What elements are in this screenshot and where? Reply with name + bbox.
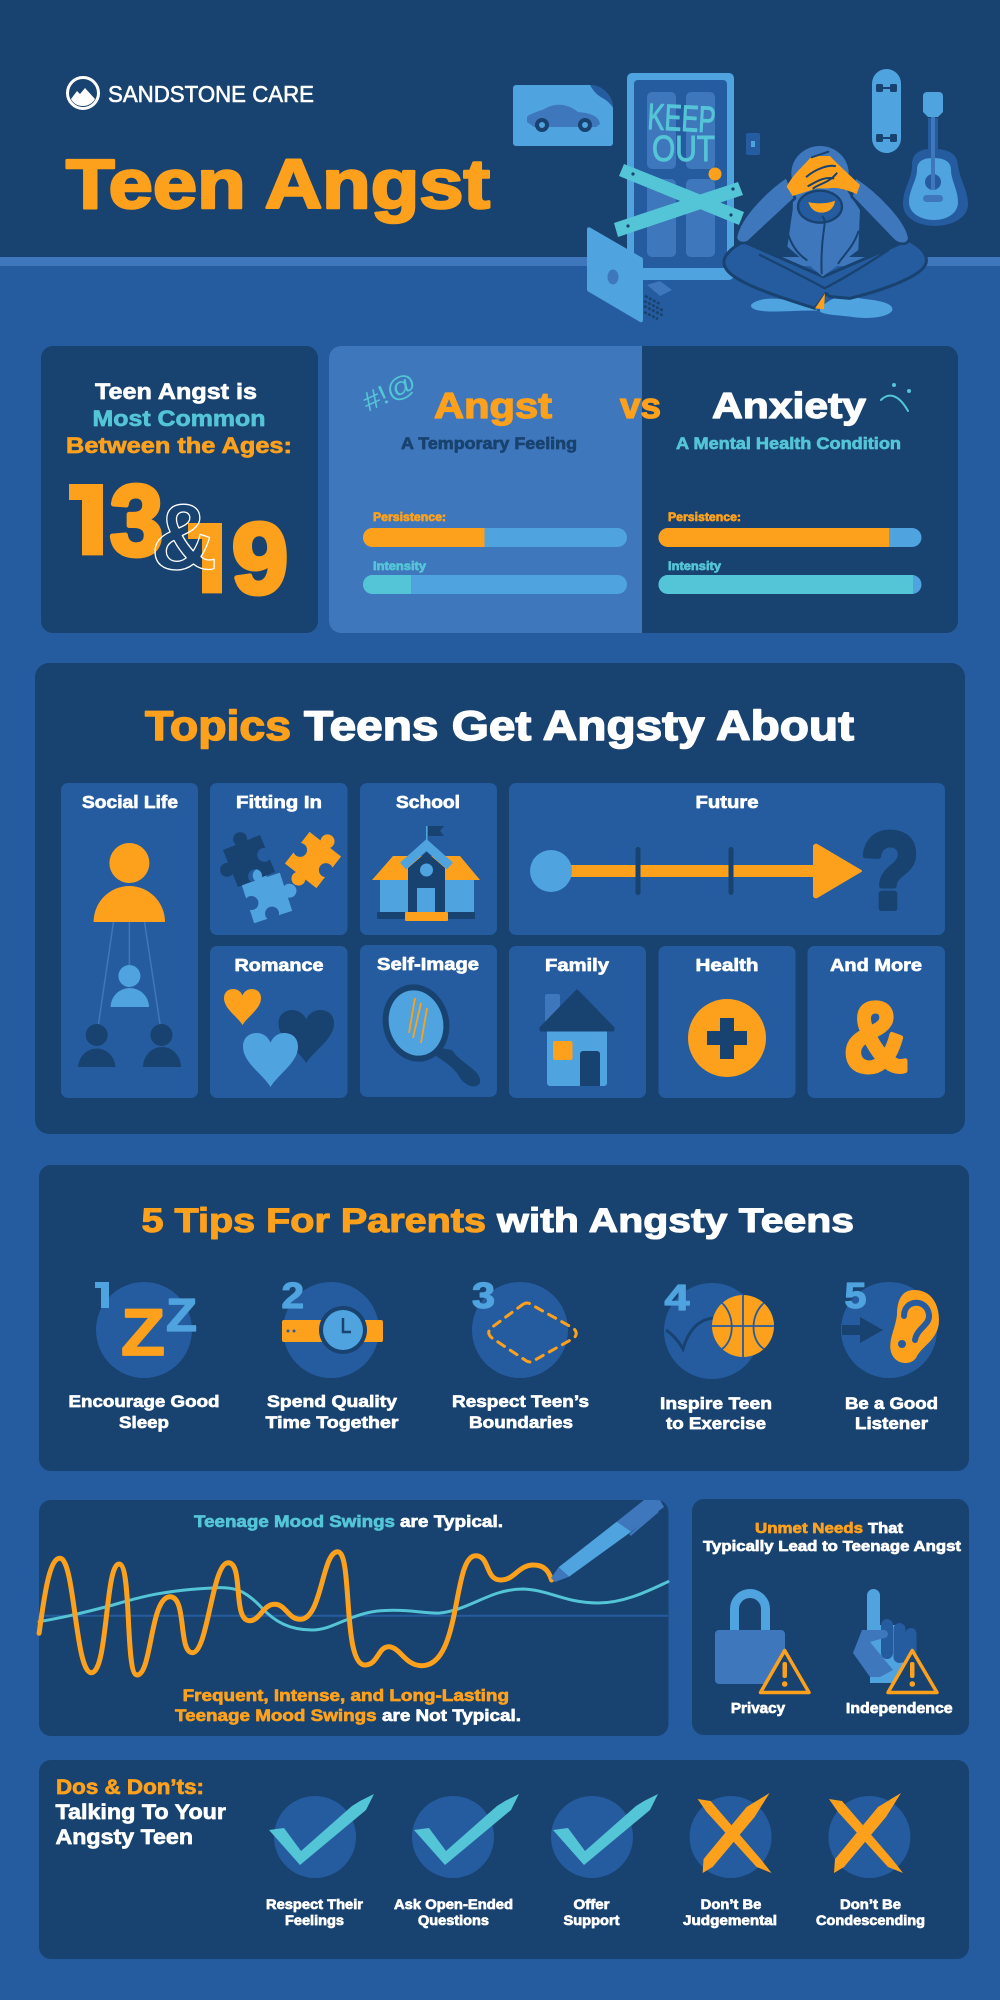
don't: be condescending bbox=[816, 1793, 925, 1928]
logo: Sandstone Care bbox=[68, 78, 314, 108]
don't: be condescending: Condescending bbox=[816, 1913, 925, 1928]
card: romance: Romance bbox=[234, 955, 324, 975]
bars: anxiety bbox=[658, 512, 922, 594]
do: respect their feelings: Feelings bbox=[285, 1913, 344, 1928]
tip 4: exercise: Inspire Teen bbox=[660, 1394, 772, 1413]
heading: topics: Topics bbox=[145, 702, 291, 749]
card: and more: & bbox=[844, 982, 908, 1092]
icon: padlock with warning bbox=[715, 1594, 809, 1717]
heading: typical swings bbox=[194, 1512, 503, 1531]
tip 5: listen: Listener bbox=[855, 1414, 928, 1433]
card: and more: And More bbox=[830, 955, 922, 975]
big numbers 13 & 19 bbox=[69, 482, 287, 596]
tip 3: boundaries bbox=[452, 1275, 589, 1432]
heading: dos and don'ts: Talking To Your bbox=[56, 1801, 226, 1824]
tip 2: quality time: 2 bbox=[282, 1275, 304, 1316]
tip 1: sleep bbox=[68, 1275, 219, 1432]
chart: mood curves bbox=[39, 1552, 668, 1675]
don't: be condescending: Don’t Be bbox=[840, 1897, 902, 1912]
tip 1: sleep: Z bbox=[166, 1289, 197, 1341]
heading: most common ages bbox=[66, 379, 292, 458]
do: offer support: Support bbox=[564, 1913, 620, 1928]
heading: dos and don'ts: Dos & Don’ts: bbox=[56, 1776, 204, 1799]
icon: door with keep out bbox=[614, 73, 744, 280]
do: offer support: Offer bbox=[574, 1897, 610, 1912]
panel: age range bbox=[41, 346, 318, 633]
tip 4: exercise: 4 bbox=[664, 1277, 690, 1318]
tip 2: quality time: Time Together bbox=[266, 1413, 399, 1432]
tip 1: sleep: Z bbox=[121, 1295, 165, 1369]
card: fitting in: Fitting In bbox=[236, 792, 322, 812]
heading: topics: Teens Get Angsty About bbox=[304, 702, 854, 749]
tip 4: exercise bbox=[660, 1277, 774, 1433]
tip 3: boundaries: 3 bbox=[472, 1275, 495, 1316]
bars: angst: Persistence: bbox=[373, 512, 446, 524]
icon: sad face bbox=[881, 384, 910, 411]
label: vs: vs bbox=[620, 385, 661, 426]
bars: angst: Intensity bbox=[373, 561, 427, 573]
heading: most common ages: Most Common bbox=[92, 406, 266, 431]
icon: laptop bbox=[587, 227, 672, 322]
panel: angst vs anxiety bbox=[329, 346, 958, 633]
card: social life: Social Life bbox=[82, 792, 178, 812]
logo: Sandstone Care: SANDSTONE CARE bbox=[108, 81, 314, 107]
card: social life bbox=[61, 783, 198, 1098]
big numbers 13 & 19: & bbox=[151, 484, 217, 589]
heading: unmet needs: Typically Lead to Teenage Angst bbox=[703, 1538, 961, 1555]
card: self-image bbox=[360, 945, 497, 1097]
card: fitting in bbox=[209, 783, 348, 935]
tip 1: sleep: 1 bbox=[96, 1275, 112, 1316]
card: school: School bbox=[396, 792, 460, 812]
header band bbox=[0, 0, 1000, 266]
heading: tips: 5 Tips For Parents bbox=[142, 1202, 486, 1240]
caption: not typical swings: Frequent, Intense, and Long-Lasting bbox=[183, 1686, 509, 1705]
don't: be judgemental bbox=[683, 1793, 777, 1928]
card: health: Health bbox=[696, 955, 758, 975]
do: respect their feelings: Respect Their bbox=[266, 1897, 364, 1912]
card: family bbox=[509, 946, 646, 1098]
icon: door with keep out: KEEP bbox=[647, 96, 717, 141]
icon: skateboard bbox=[872, 69, 901, 153]
do: open-ended questions: Ask Open-Ended bbox=[394, 1897, 513, 1912]
tip 5: listen: Be a Good bbox=[845, 1394, 938, 1413]
panel: tips for parents bbox=[39, 1165, 969, 1471]
panel: topics bbox=[35, 663, 965, 1134]
heading: topics bbox=[145, 702, 854, 749]
tip 3: boundaries: Boundaries bbox=[469, 1413, 573, 1432]
tip 2: quality time bbox=[266, 1275, 399, 1432]
heading: dos and don'ts: Angsty Teen bbox=[56, 1826, 193, 1849]
card: family: Family bbox=[545, 955, 609, 975]
heading: typical swings: Teenage Mood Swings bbox=[194, 1512, 395, 1531]
heading: typical swings: are Typical. bbox=[400, 1512, 503, 1531]
tip 2: quality time: Spend Quality bbox=[267, 1392, 398, 1411]
heading: anxiety: Anxiety bbox=[712, 385, 866, 426]
icon: guitar bbox=[903, 92, 968, 226]
icon: door with keep out: OUT bbox=[652, 128, 715, 169]
panel: dos and don'ts bbox=[39, 1760, 969, 1959]
icon: car poster bbox=[513, 85, 613, 146]
tip 5: listen bbox=[841, 1275, 939, 1433]
caption: not typical swings: Teenage Mood Swings bbox=[175, 1706, 377, 1725]
card: school bbox=[360, 783, 497, 935]
don't: be judgemental: Don’t Be bbox=[701, 1897, 762, 1912]
heading: unmet needs bbox=[703, 1520, 961, 1555]
big numbers 13 & 19: 1 bbox=[195, 503, 237, 615]
do: open-ended questions: Questions bbox=[418, 1913, 489, 1928]
subtitle: temporary feeling: A Temporary Feeling bbox=[401, 434, 577, 453]
don't: be judgemental: Judgemental bbox=[683, 1913, 777, 1928]
do: offer support bbox=[551, 1794, 658, 1928]
subtitle: mental health condition: A Mental Health Condition bbox=[676, 434, 901, 453]
panel: unmet needs bbox=[692, 1499, 969, 1735]
heading: unmet needs: That bbox=[868, 1520, 903, 1537]
icon: light switch bbox=[746, 133, 760, 155]
caption: not typical swings: are Not Typical. bbox=[382, 1706, 521, 1725]
icon: raised hand with warning bbox=[846, 1589, 953, 1717]
card: self-image: Self-Image bbox=[377, 954, 479, 974]
big numbers 13 & 19: 1 bbox=[76, 465, 118, 577]
heading: most common ages: Between the Ages: bbox=[66, 433, 292, 458]
card: health bbox=[658, 946, 796, 1098]
tip 1: sleep: Encourage Good bbox=[68, 1392, 219, 1411]
panel: mood swings chart bbox=[39, 1500, 668, 1736]
tip 5: listen: 5 bbox=[844, 1275, 866, 1316]
illustration: teen in bedroom bbox=[513, 69, 968, 322]
card: future: Future bbox=[696, 792, 759, 812]
heading: most common ages: Teen Angst is bbox=[95, 379, 257, 404]
heading: tips bbox=[142, 1202, 854, 1240]
heading: angst: Angst bbox=[434, 385, 552, 426]
icon: padlock with warning: Privacy bbox=[731, 1700, 786, 1717]
heading: unmet needs: Unmet Needs bbox=[755, 1520, 863, 1537]
big numbers 13 & 19: 3 bbox=[110, 465, 163, 577]
bars: anxiety: Intensity bbox=[668, 561, 722, 573]
heading: dos and don'ts bbox=[56, 1776, 226, 1849]
card: and more bbox=[808, 946, 945, 1098]
tip 3: boundaries: Respect Teen’s bbox=[452, 1392, 589, 1411]
bars: angst bbox=[363, 512, 627, 594]
icon: pen bbox=[551, 1500, 664, 1582]
caption: not typical swings bbox=[175, 1686, 521, 1725]
card: future: ? bbox=[861, 810, 919, 931]
tip 4: exercise: to Exercise bbox=[666, 1414, 766, 1433]
icon: raised hand with warning: Independence bbox=[846, 1700, 953, 1717]
do: respect their feelings bbox=[266, 1794, 374, 1928]
scribble: symbols: #!@ bbox=[358, 367, 421, 417]
do: open-ended questions bbox=[394, 1794, 519, 1928]
figure: teen sitting with head in hands bbox=[724, 146, 926, 318]
big numbers 13 & 19: 9 bbox=[232, 503, 288, 615]
card: romance bbox=[210, 946, 348, 1098]
heading: tips: with Angsty Teens bbox=[496, 1202, 854, 1240]
title: Teen Angst bbox=[66, 145, 490, 223]
bars: anxiety: Persistence: bbox=[668, 512, 741, 524]
tip 1: sleep: Sleep bbox=[119, 1413, 169, 1432]
card: future bbox=[509, 783, 945, 935]
